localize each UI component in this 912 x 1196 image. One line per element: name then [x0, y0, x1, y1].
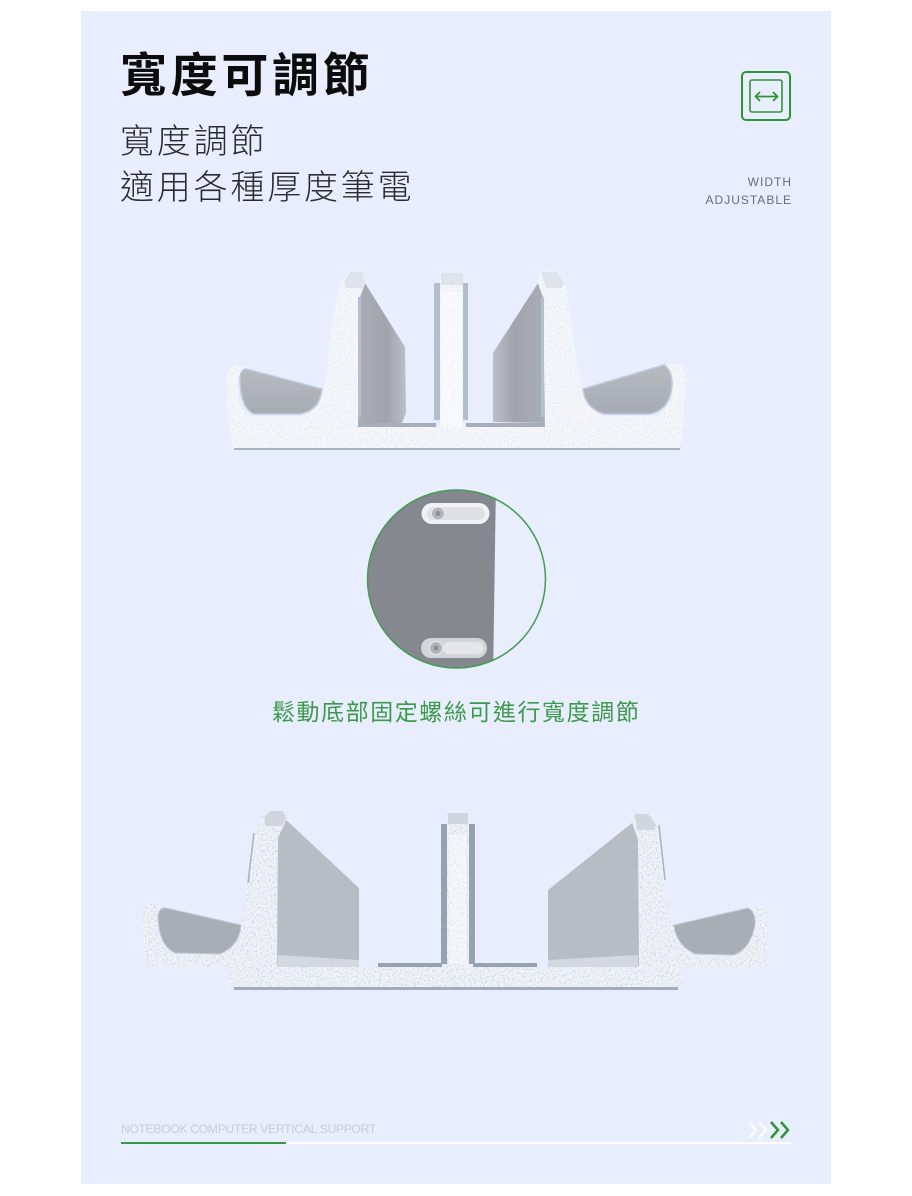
panel foot highlights	[277, 955, 638, 967]
left gray panel	[277, 817, 359, 966]
illustration layer	[121, 71, 791, 1144]
subtitle text: 適用各種厚度筆電	[120, 169, 414, 207]
footer text: NOTEBOOK COMPUTER VERTICAL SUPPORT	[121, 1122, 376, 1136]
right gray panel	[548, 823, 639, 966]
gray plate	[368, 490, 496, 668]
upright caps	[344, 271, 564, 288]
center column highlight	[449, 835, 466, 963]
upper slot	[422, 503, 490, 524]
stand: narrow setting	[227, 270, 685, 450]
left gray panel	[358, 280, 406, 423]
subtitle text: 寬度調節	[120, 123, 267, 161]
right foot pad	[674, 908, 755, 955]
upright caps	[264, 811, 656, 830]
detail circle: screws	[366, 489, 546, 669]
title: 寬度可調節	[120, 49, 374, 102]
english label: ADJUSTABLE	[706, 193, 792, 207]
icon: width adjust	[742, 72, 790, 120]
stand: wide setting	[142, 811, 769, 990]
silver body	[227, 270, 685, 449]
left foot pad	[240, 369, 322, 414]
silver body	[142, 811, 769, 987]
circle outline	[368, 490, 546, 668]
lower slot	[421, 638, 487, 658]
base shadow line	[234, 448, 680, 450]
left foot pad	[158, 908, 241, 954]
inner strips by uprights	[358, 297, 544, 417]
center cap	[448, 813, 468, 824]
footer progress line	[121, 1142, 791, 1144]
right foot pad	[583, 365, 672, 414]
center side strips	[434, 283, 468, 420]
floor plates	[378, 963, 537, 967]
english label: WIDTH	[748, 175, 792, 189]
upright outer edges	[248, 825, 665, 883]
english label	[706, 175, 792, 207]
center column highlight	[441, 292, 462, 427]
base shadow line	[234, 987, 678, 990]
caption: 鬆動底部固定螺絲可進行寬度調節	[272, 699, 640, 725]
subtitle text	[120, 123, 414, 207]
arrows: footer chevrons	[749, 1122, 788, 1138]
floor plates	[358, 423, 546, 427]
right gray panel	[493, 280, 545, 423]
center side strips	[441, 824, 475, 964]
center cap	[441, 273, 463, 285]
